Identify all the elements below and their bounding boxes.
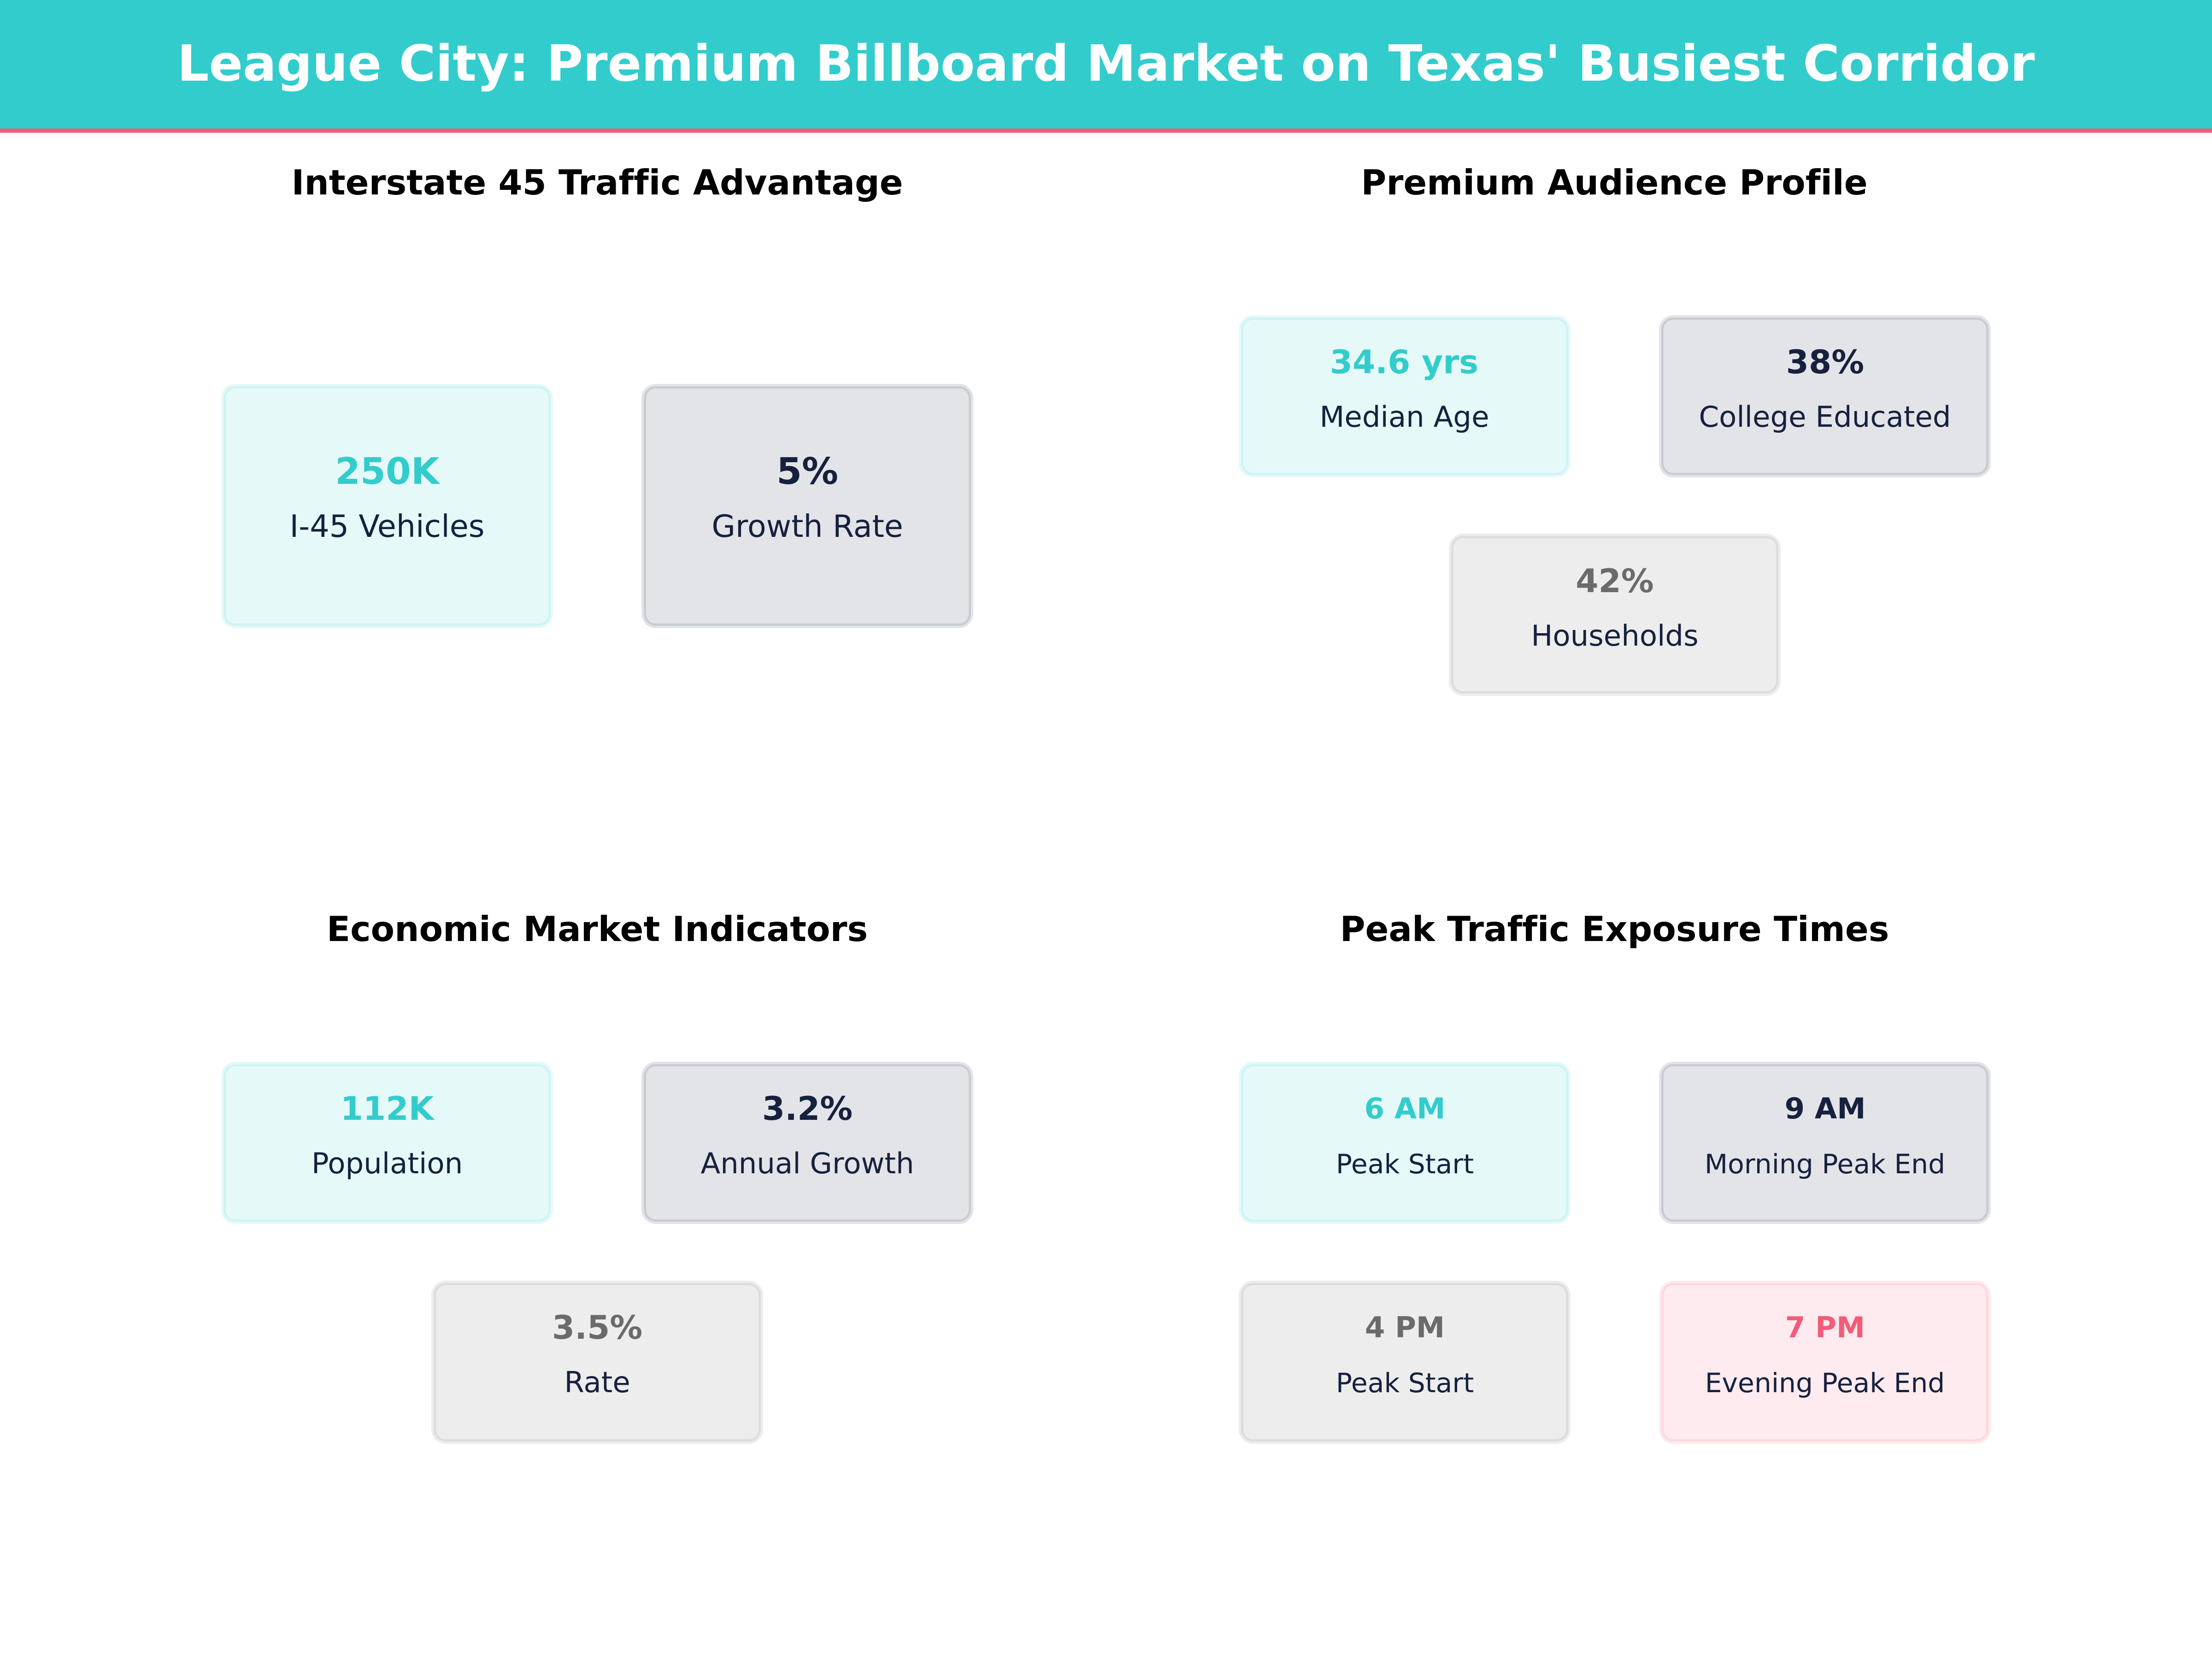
- card: median age: 34.6 yrs: [1330, 343, 1478, 381]
- card: rate: Rate: [564, 1365, 630, 1399]
- card: population: [224, 1064, 551, 1222]
- card: 4 PM: [1241, 1283, 1568, 1441]
- card: 9 AM: 9 AM: [1785, 1092, 1865, 1125]
- card: median age: [1241, 318, 1568, 475]
- card: households: 42%: [1576, 562, 1654, 600]
- card: 6 AM: 6 AM: [1365, 1092, 1445, 1125]
- card: population: 112K: [341, 1089, 435, 1128]
- panel: premium audience profile: [1241, 162, 1988, 694]
- card: I-45 vehicles: [224, 386, 551, 626]
- card: 4 PM: 4 PM: [1365, 1311, 1445, 1344]
- card: growth rate: 5%: [777, 450, 838, 493]
- card: college educated: 38%: [1786, 343, 1864, 381]
- card: 4 PM: Peak Start: [1336, 1367, 1474, 1399]
- card: I-45 vehicles: 250K: [335, 450, 441, 493]
- card: growth rate: [644, 386, 971, 626]
- card: growth rate: Growth Rate: [712, 508, 903, 544]
- card: rate: [434, 1283, 761, 1441]
- card: rate: 3.5%: [552, 1308, 642, 1347]
- card: 9 AM: [1661, 1064, 1988, 1222]
- card: annual growth: Annual Growth: [700, 1147, 914, 1180]
- card: college educated: [1661, 318, 1988, 475]
- card: 9 AM: Morning Peak End: [1705, 1148, 1945, 1180]
- heading: economic: Economic Market Indicators: [327, 909, 868, 949]
- card: households: Households: [1531, 619, 1699, 653]
- card: I-45 vehicles: I-45 Vehicles: [289, 508, 485, 544]
- card: college educated: College Educated: [1699, 400, 1951, 434]
- card: households: [1451, 536, 1778, 694]
- panel: economic market indicators: [224, 909, 971, 1441]
- heading: traffic: Interstate 45 Traffic Advantage: [291, 162, 903, 203]
- card: annual growth: [644, 1064, 971, 1222]
- card: median age: Median Age: [1319, 400, 1489, 434]
- header banner: [0, 0, 2212, 133]
- card: 7 PM: 7 PM: [1785, 1311, 1865, 1344]
- heading: peak times: Peak Traffic Exposure Times: [1340, 909, 1889, 949]
- card: annual growth: 3.2%: [762, 1089, 853, 1128]
- title: League City: Premium Billboard Market on Texas' Busiest Corridor: [177, 34, 2035, 93]
- card: 6 AM: Peak Start: [1336, 1148, 1474, 1180]
- card: population: Population: [312, 1147, 463, 1180]
- panel: peak traffic exposure times: [1241, 909, 1988, 1441]
- heading: audience: Premium Audience Profile: [1361, 162, 1868, 203]
- card: 6 AM: [1241, 1064, 1568, 1222]
- card: 7 PM: Evening Peak End: [1705, 1367, 1945, 1399]
- panel: Interstate 45 traffic advantage: [224, 162, 971, 626]
- card: 7 PM: [1661, 1283, 1988, 1441]
